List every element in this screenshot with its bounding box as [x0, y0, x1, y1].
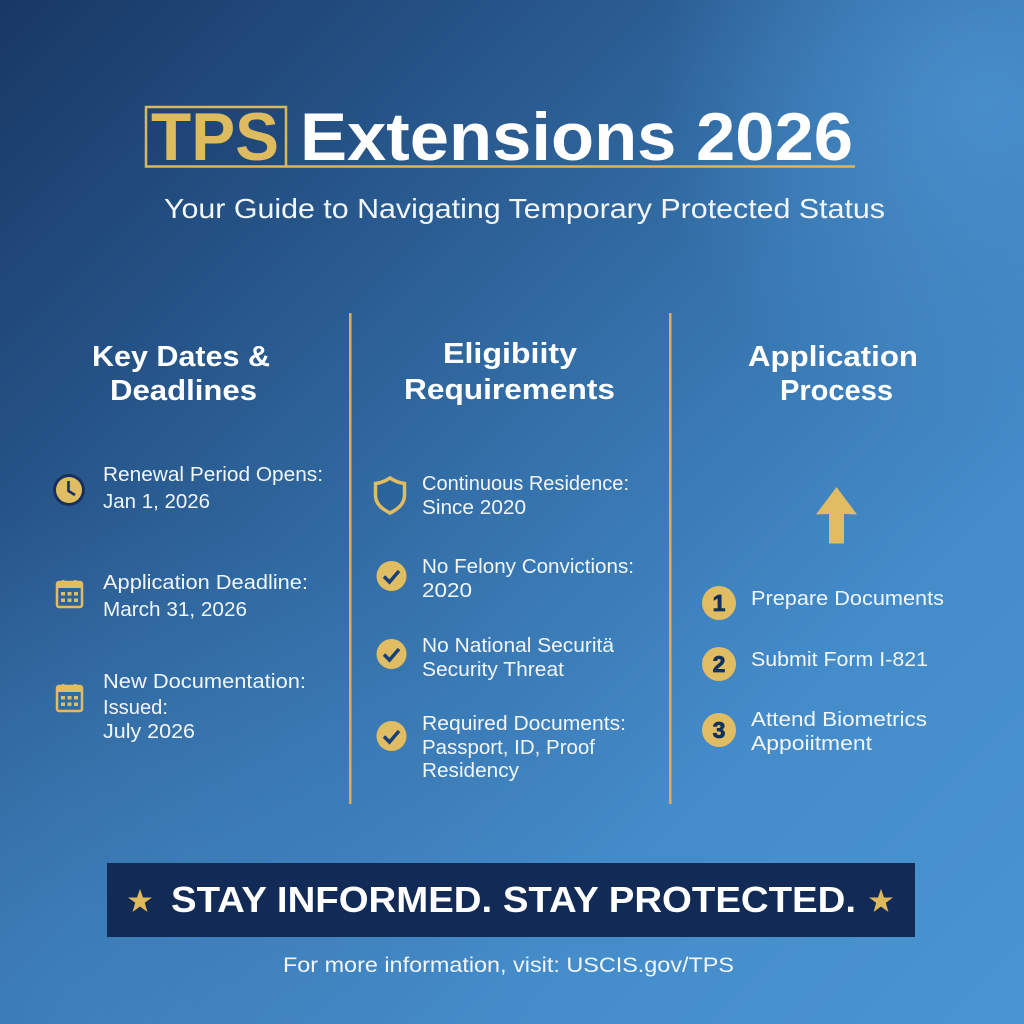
- icon: shield: [376, 478, 404, 513]
- text: application deadline: [103, 572, 308, 621]
- text: no national security: [422, 635, 615, 681]
- icon: calendar: [57, 580, 82, 607]
- title: TPS: TPS: [151, 99, 279, 175]
- text: continuous residence: [422, 473, 629, 519]
- text: renewal period: [103, 464, 323, 513]
- title: TPS gold box and underline: [146, 107, 855, 166]
- column divider left: [349, 313, 352, 804]
- step 3: Attend Biometrics: [751, 709, 927, 731]
- text: required documents: Required Documents:: [422, 713, 626, 735]
- panel: eligibility: [376, 338, 634, 782]
- text: required documents: Residency: [422, 760, 519, 782]
- step 2: Submit Form I-821: [751, 649, 928, 671]
- panel: key dates: [53, 341, 323, 743]
- heading: Eligibility Requirements: Requirements: [404, 374, 615, 406]
- text: no felony: [422, 556, 634, 602]
- text: no felony: No Felony Convictions:: [422, 556, 634, 578]
- title: [146, 99, 855, 175]
- icon: star right: [869, 889, 893, 912]
- text: continuous residence: Since 2020: [422, 497, 526, 519]
- banner text: STAY INFORMED. STAY PROTECTED.: [171, 879, 856, 920]
- heading: Key Dates & Deadlines: Deadlines: [110, 375, 257, 407]
- heading: Eligibility Requirements: Eligibiity: [443, 338, 577, 370]
- text: required documents: Passport, ID, Proof: [422, 737, 595, 759]
- column divider right: [669, 313, 672, 804]
- text: renewal period: Renewal Period Opens:: [103, 464, 323, 486]
- step 1: Prepare Documents: [751, 588, 944, 610]
- step 1: [702, 586, 944, 620]
- text: new documentation: New Documentation:: [103, 671, 306, 693]
- heading: Eligibility Requirements: [404, 338, 615, 406]
- text: new documentation: [103, 671, 306, 743]
- step 3: [702, 709, 927, 755]
- icon: clock: [53, 474, 85, 506]
- title: Extensions 2026: Extensions 2026: [300, 99, 853, 175]
- footer link text: For more information, visit: USCIS.gov/TPS: [283, 954, 734, 977]
- text: renewal period: Jan 1, 2026: [103, 491, 210, 513]
- text: new documentation: July 2026: [103, 721, 195, 743]
- heading: Application Process: [748, 341, 918, 407]
- step 3: 3: [713, 717, 725, 743]
- panel: application process: [702, 341, 944, 755]
- icon: up arrow: [816, 487, 857, 544]
- icon: check: [376, 721, 406, 751]
- text: no felony: 2020: [422, 580, 472, 602]
- heading: Key Dates & Deadlines: [92, 341, 270, 407]
- heading: Application Process: Application: [748, 341, 918, 373]
- text: application deadline: Application Deadline:: [103, 572, 308, 594]
- heading: Key Dates & Deadlines: Key Dates &: [92, 341, 270, 373]
- icon: star left: [128, 889, 152, 912]
- text: application deadline: March 31, 2026: [103, 599, 247, 621]
- text: continuous residence: Continuous Residence:: [422, 473, 629, 495]
- step 3: Appoiitment: [751, 733, 872, 755]
- step 1: 1: [713, 590, 726, 616]
- text: new documentation: Issued:: [103, 697, 168, 719]
- text: no national security: No National Securitä: [422, 635, 615, 657]
- step 2: 2: [713, 651, 725, 677]
- subtitle: Your Guide to Navigating Temporary Protected Status: [164, 193, 885, 224]
- heading: Application Process: Process: [780, 375, 893, 407]
- step 2: [702, 647, 928, 681]
- text: no national security: Security Threat: [422, 659, 564, 681]
- banner: [107, 863, 915, 937]
- icon: check: [376, 639, 406, 669]
- icon: check: [376, 561, 406, 591]
- icon: calendar: [57, 684, 82, 711]
- text: required documents: [422, 713, 626, 782]
